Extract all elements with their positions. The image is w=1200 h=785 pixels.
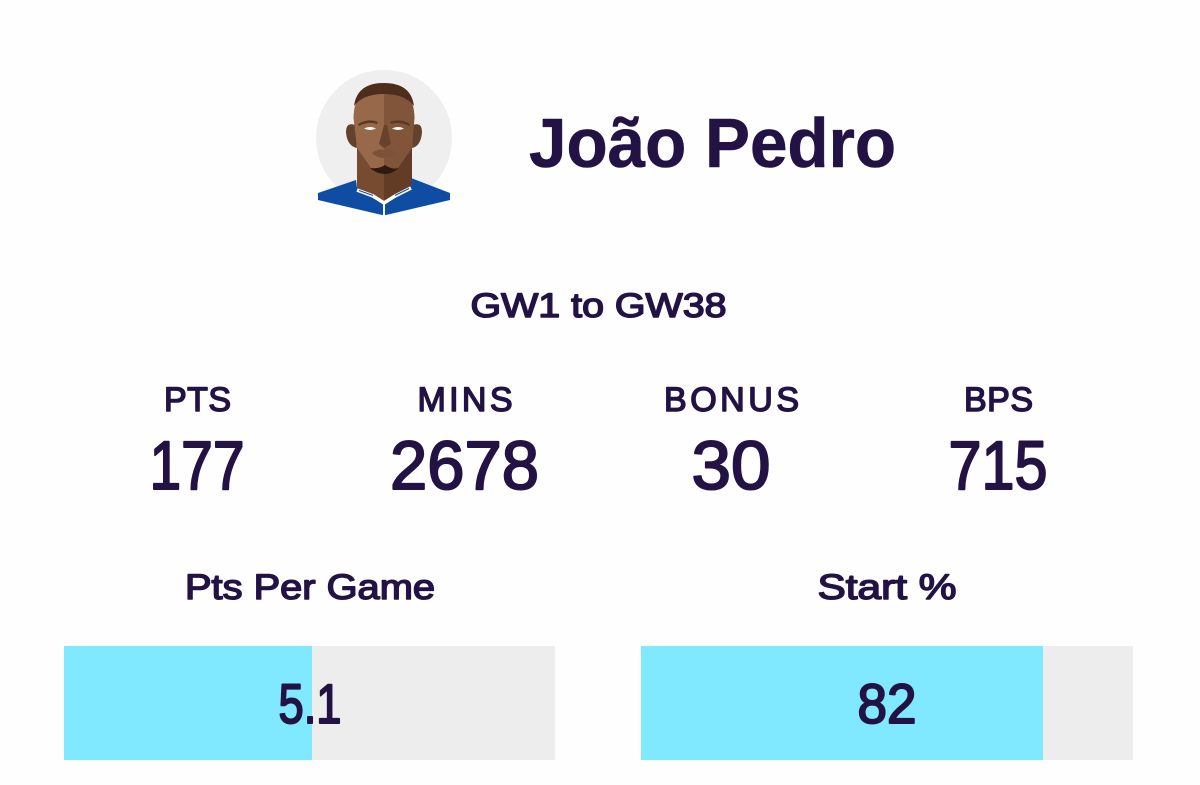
bar: start percent	[641, 646, 1133, 760]
bar value: 82	[858, 672, 916, 735]
gameweek range: GW1 to GW38	[470, 287, 726, 325]
face left half	[354, 84, 384, 172]
brows	[358, 120, 410, 126]
stat: BPS	[948, 381, 1048, 504]
nose	[379, 125, 391, 148]
stat value: 30	[692, 427, 770, 504]
bar track	[64, 646, 555, 760]
stat label: MINS	[418, 381, 512, 419]
beard	[370, 165, 399, 174]
stat label: PTS	[164, 381, 231, 419]
stat label: BPS	[964, 381, 1033, 419]
eyes	[364, 127, 404, 130]
heading: start percent: Start %	[818, 568, 956, 607]
bar fill	[64, 646, 312, 760]
stat value: 715	[948, 427, 1048, 504]
ears	[346, 124, 422, 148]
placket	[383, 201, 385, 215]
neck	[357, 148, 384, 203]
stat: bonus	[664, 381, 799, 504]
mouth	[372, 149, 397, 158]
stat: points	[150, 381, 244, 504]
face right half	[384, 84, 414, 172]
heading: points per game: Pts Per Game	[185, 568, 435, 607]
bar value: 5.1	[278, 672, 342, 735]
stat value: 177	[150, 427, 244, 504]
collar	[357, 188, 411, 203]
stat value: 2678	[390, 427, 539, 504]
bar: points per game	[64, 646, 555, 760]
stat: minutes	[390, 381, 539, 504]
player portrait	[316, 70, 452, 215]
stat label: BONUS	[664, 381, 799, 419]
portrait background circle	[316, 70, 452, 206]
jersey	[318, 178, 450, 215]
hair	[354, 83, 414, 106]
bar track	[641, 646, 1133, 760]
player name: João Pedro	[529, 104, 896, 182]
bar fill	[641, 646, 1043, 760]
